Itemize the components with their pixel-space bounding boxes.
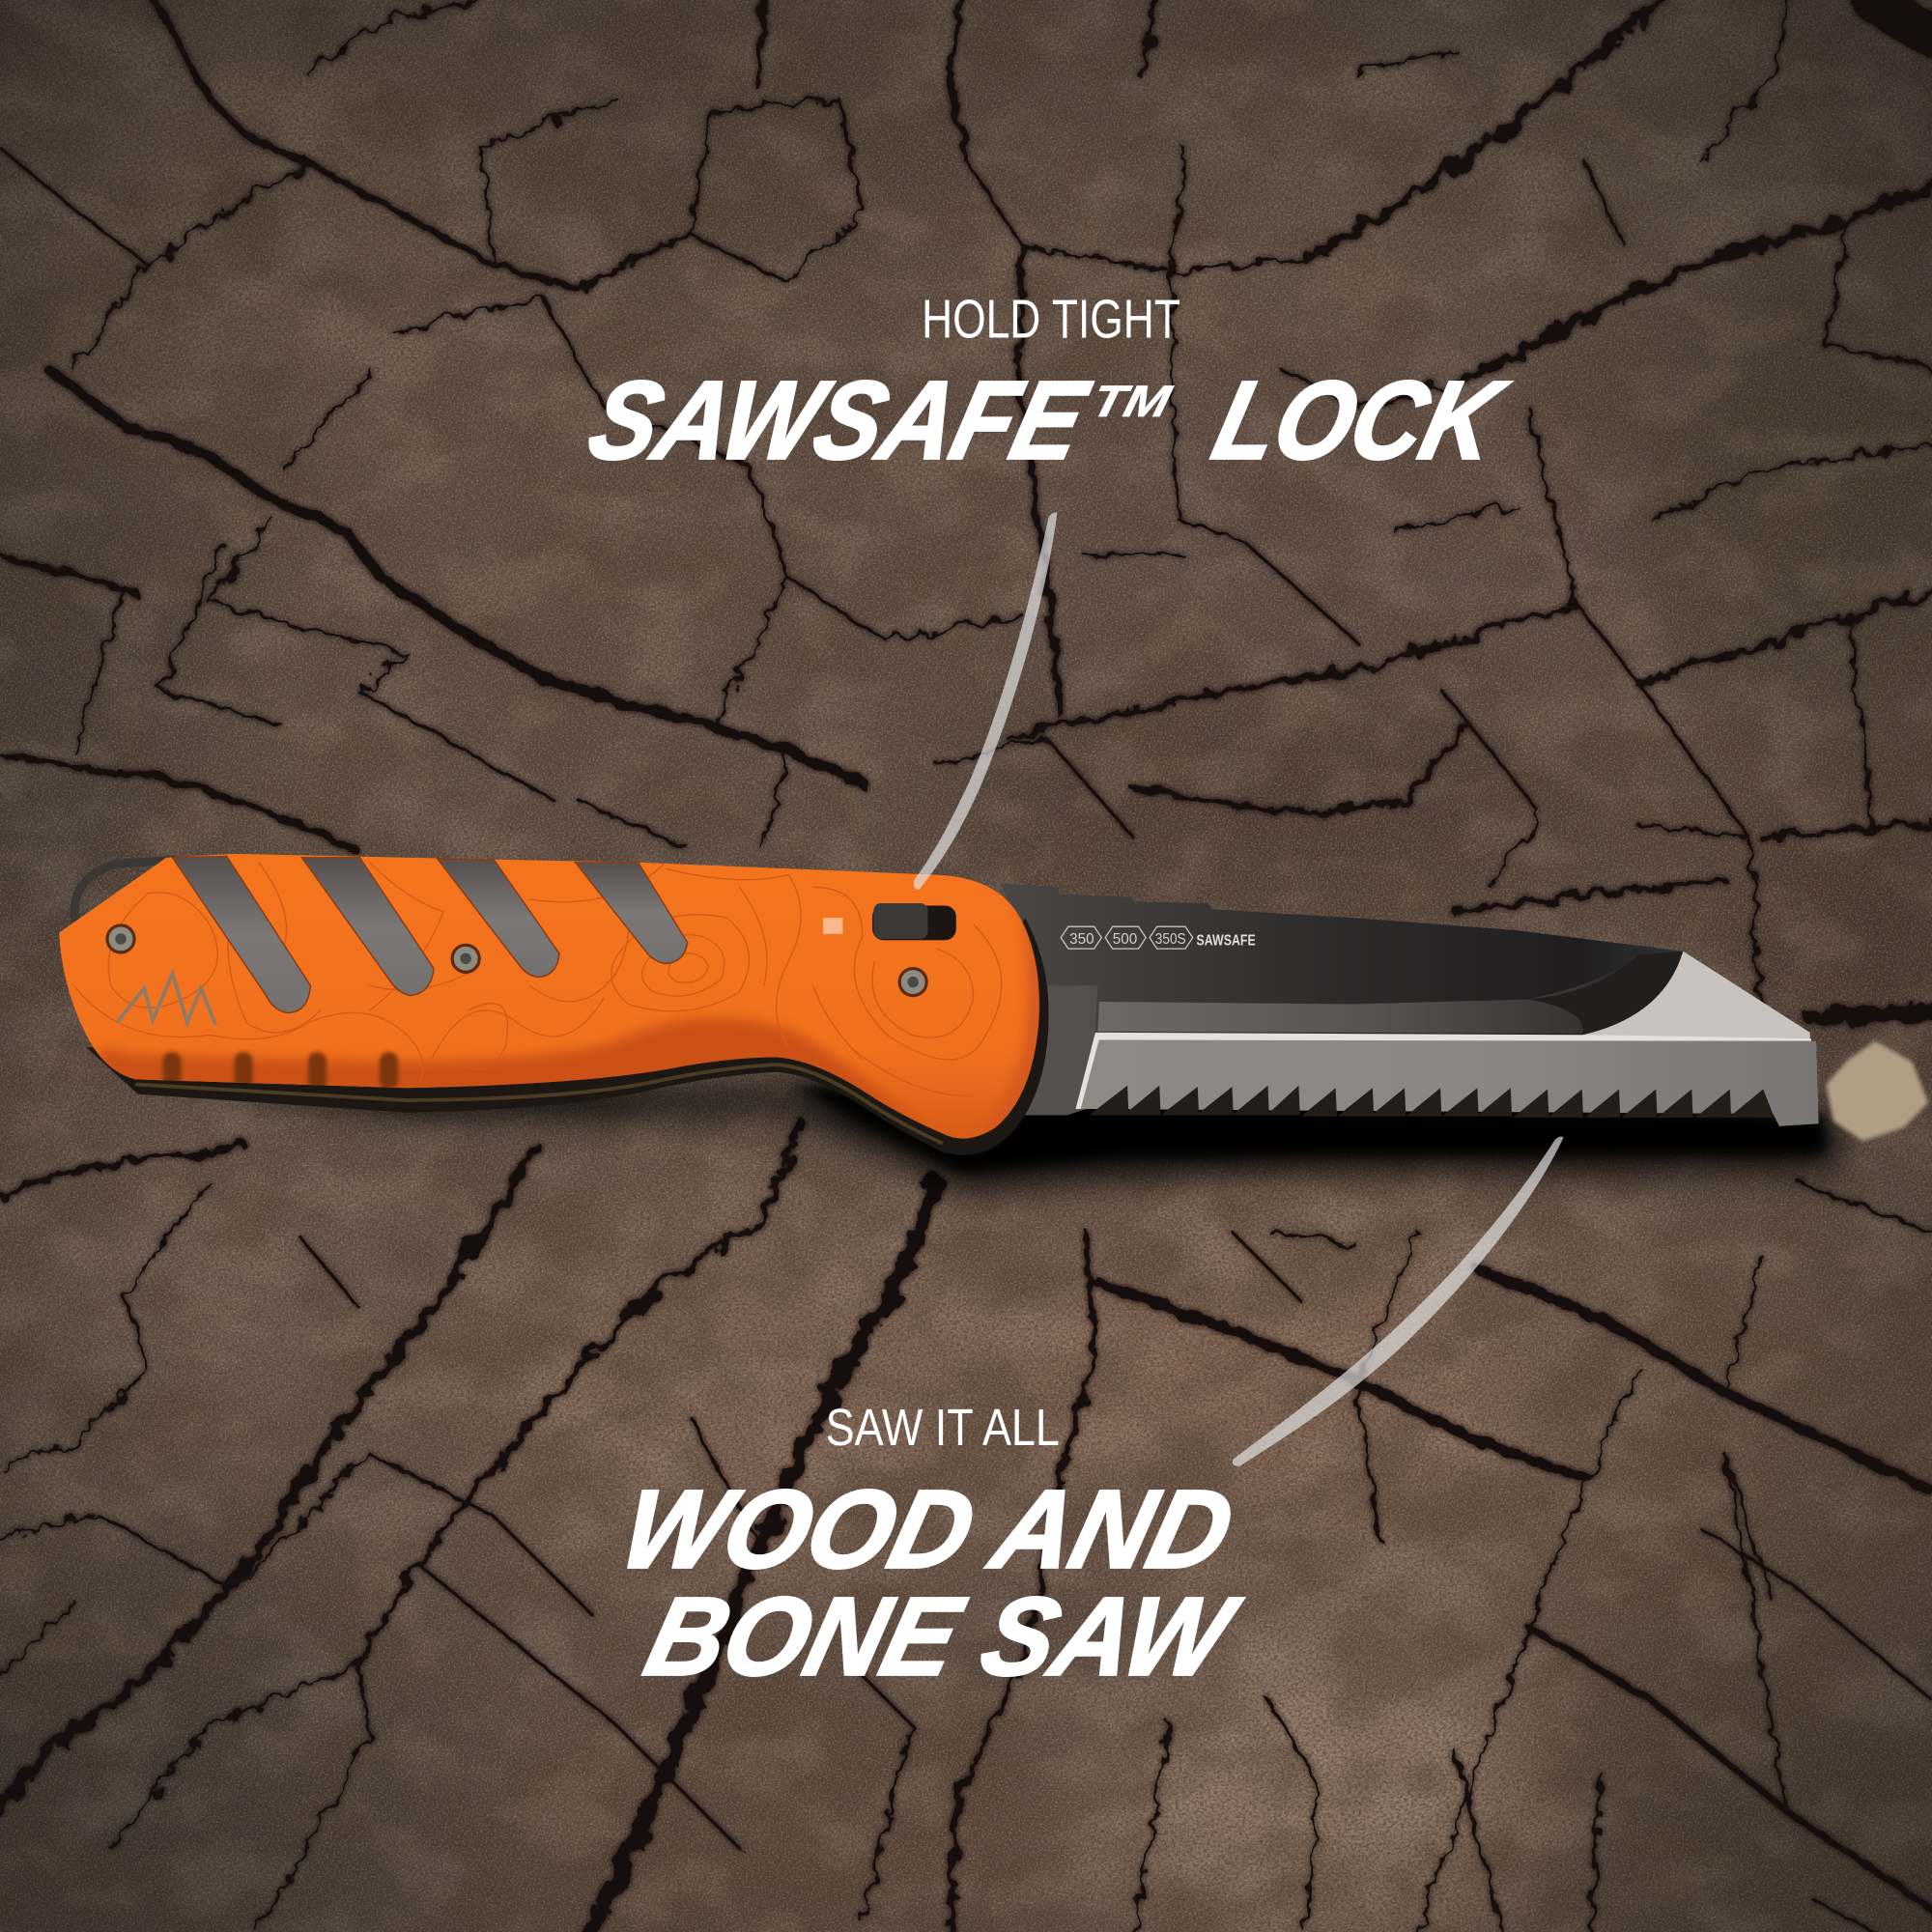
lanyard loop [74,860,175,922]
liner brown layer [135,1065,943,1144]
saw teeth [1090,1086,1775,1118]
heading: sawsafe lock: SAWSAFE [578,357,1100,482]
handle right edge shade [976,912,1039,1137]
knife shadow [111,1072,1842,1189]
handle lower shadow band [97,1013,933,1130]
heading: wood and bone saw: BONE SAW [635,1574,1251,1698]
callout: saw it all [611,1400,1251,1698]
folding knife [59,854,1819,1158]
grey grip inlays [173,856,688,1012]
heading: sawsafe lock: TM [1087,377,1177,426]
blade [999,884,1819,1126]
callout: hold tight [578,288,1518,482]
callout line to saw [1233,1136,1564,1466]
pebble beside blade tip [1826,1041,1928,1141]
dark cap over bevel tip [1528,952,1683,1034]
finger grooves [162,1052,398,1090]
brand mountain logo [117,974,215,1025]
blade stamp: compatibility marks [1061,926,1193,949]
small glare on handle [823,918,842,934]
heading: wood and bone saw [611,1466,1251,1698]
heading: wood and bone saw: WOOD AND [611,1466,1245,1591]
blade dark body [999,884,1683,1115]
callout line to lock [914,512,1057,890]
silver tip [1582,952,1810,1040]
blade lower heel [999,985,1097,1115]
heading: sawsafe lock [578,357,1518,482]
stamp text 500: 500 [1113,931,1137,948]
ground bevel [1097,955,1650,1034]
kicker: saw it all: SAW IT ALL [826,1400,1060,1457]
heading: sawsafe lock: LOCK [1203,357,1518,482]
kicker: hold tight: HOLD TIGHT [922,288,1180,349]
sawsafe lock slider [872,903,956,940]
stamp text 350: 350 [1069,931,1094,948]
saw section [1081,1040,1819,1126]
topographic line pattern [74,863,1002,1096]
orange handle [59,854,1047,1158]
stamp text SAWSAFE: SAWSAFE [1197,932,1256,949]
handle liner [86,918,1049,1155]
stamp text 350S: 350S [1155,931,1186,948]
white edge line [1076,1033,1811,1109]
handle screws [107,925,926,996]
